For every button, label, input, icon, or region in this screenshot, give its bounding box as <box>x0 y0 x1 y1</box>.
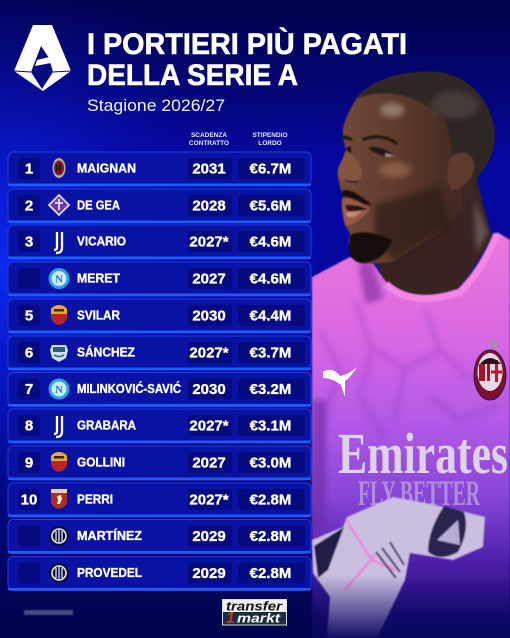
row 8: Grabara: €3.1M <box>250 418 291 434</box>
row 7: Milinković-Savić: 7 <box>25 381 33 398</box>
row 8: Grabara <box>8 409 311 443</box>
row 10: Perri: PERRI <box>77 492 113 506</box>
cheek highlight <box>379 162 411 178</box>
row 7: Milinković-Savić: 2030 <box>192 381 226 398</box>
player photo: Maignan <box>312 72 510 638</box>
neck highlight <box>474 198 488 254</box>
icon: Como <box>50 345 68 362</box>
row 3: Vicario: VICARIO <box>77 234 126 248</box>
column header: gross salary <box>252 132 288 147</box>
blurred watermark <box>24 610 73 615</box>
icon: Fiorentina <box>49 195 69 215</box>
row 2: De Gea: 2028 <box>192 198 226 214</box>
row 10: Perri: 2027* <box>189 492 229 508</box>
transfermarkt logo <box>222 598 286 627</box>
row 8: Grabara: 8 <box>25 418 33 434</box>
hair sheen <box>431 91 479 119</box>
left side shadow <box>312 400 326 530</box>
row 6: Sánchez: €3.7M <box>250 344 291 362</box>
row 12: Provedel: PROVEDEL <box>77 566 142 580</box>
row 7: Milinković-Savić: €3.2M <box>250 381 291 398</box>
crest star <box>486 337 500 350</box>
row 2: De Gea: 2 <box>25 198 33 214</box>
row 2: De Gea <box>8 189 311 223</box>
row 3: Vicario: 3 <box>25 234 33 250</box>
icon: Napoli <box>48 268 70 289</box>
player hair <box>356 72 494 174</box>
row 4: Meret <box>8 262 311 296</box>
row 5: Svilar: €4.4M <box>250 308 291 324</box>
fade into background <box>312 575 510 638</box>
row 11: Martínez: 2029 <box>192 528 226 545</box>
row 2: De Gea: €5.6M <box>250 198 291 214</box>
row 6: Sánchez: 6 <box>25 344 33 362</box>
row 1: Maignan: 1 <box>25 160 33 178</box>
row 12: Provedel: €2.8M <box>250 565 291 582</box>
row 6: Sánchez <box>8 336 311 370</box>
ranking table <box>8 152 311 590</box>
icon: Inter <box>49 563 69 583</box>
player ear <box>447 153 474 190</box>
icon: Torino <box>51 489 67 509</box>
row 9: Gollini: 9 <box>25 454 33 472</box>
icon: Napoli <box>48 378 70 400</box>
icon: Napoli: N <box>55 274 63 286</box>
row 1: Maignan <box>8 152 311 186</box>
shirt fold shadow <box>358 262 384 304</box>
row 5: Svilar: 5 <box>25 308 33 324</box>
column header: contract expiry: CONTRATTO <box>189 140 229 147</box>
player head <box>338 72 494 264</box>
row 1: Maignan: 2031 <box>192 160 226 178</box>
icon: Juventus <box>54 416 62 437</box>
player neck <box>372 185 492 297</box>
row 1: Maignan: €6.7M <box>250 160 291 178</box>
column header: contract expiry <box>189 132 229 147</box>
row 4: Meret: 2027 <box>192 270 226 288</box>
row 1: Maignan: MAIGNAN <box>77 162 136 176</box>
row 7: Milinković-Savić: MILINKOVIĆ-SAVIĆ <box>77 381 181 396</box>
icon: AC Milan <box>52 158 66 178</box>
icon: Roma <box>51 305 67 325</box>
shirt collar <box>386 234 497 298</box>
row 3: Vicario: 2027* <box>189 234 229 250</box>
column header: gross salary: LORDO <box>258 140 282 147</box>
row 11: Martínez: €2.8M <box>250 528 291 545</box>
row 4: Meret: €4.6M <box>250 270 291 288</box>
title: I PORTIERI PIÙ PAGATI <box>87 27 407 61</box>
row 9: Gollini: 2027 <box>192 454 226 472</box>
row 5: Svilar <box>8 299 311 333</box>
row 2: De Gea: DE GEA <box>77 198 120 212</box>
player shirt <box>312 232 510 638</box>
title: DELLA SERIE A <box>87 59 298 92</box>
title <box>87 27 407 92</box>
puma logo <box>323 367 357 397</box>
column header: contract expiry: SCADENZA <box>191 132 227 139</box>
row 6: Sánchez: SÁNCHEZ <box>77 344 135 360</box>
row 11: Martínez <box>8 520 311 554</box>
player mouth and moustache <box>342 190 372 226</box>
row 8: Grabara: 2027* <box>189 418 229 434</box>
transfermarkt logo: markt <box>237 610 281 626</box>
row 3: Vicario: €4.6M <box>250 234 291 250</box>
player eyes and brows <box>343 137 396 157</box>
row 12: Provedel: 2029 <box>192 565 226 582</box>
row 10: Perri <box>8 483 311 517</box>
row 12: Provedel <box>8 556 311 590</box>
row 9: Gollini: GOLLINI <box>77 456 125 470</box>
goalkeeper gloves <box>312 497 485 638</box>
player nose <box>338 150 362 183</box>
transfermarkt logo: transfer <box>226 598 283 614</box>
row 5: Svilar: SVILAR <box>77 308 120 322</box>
icon: Juventus <box>54 232 62 253</box>
transfermarkt logo: 1 <box>226 610 235 627</box>
subtitle: Stagione 2026/27 <box>87 96 225 115</box>
row 9: Gollini <box>8 446 311 480</box>
row 6: Sánchez: 2027* <box>189 344 229 362</box>
row 8: Grabara: GRABARA <box>77 418 136 432</box>
row 10: Perri: 10 <box>21 492 37 508</box>
AC Milan crest <box>474 350 506 400</box>
nostril <box>345 180 358 182</box>
shirt hexagon pattern <box>320 300 500 440</box>
icon: Roma <box>51 452 67 472</box>
Serie A logo <box>14 25 71 91</box>
player goatee <box>349 232 392 263</box>
row 5: Svilar: 2030 <box>192 308 226 324</box>
row 4: Meret: MERET <box>77 272 120 286</box>
icon: Inter <box>49 526 69 546</box>
row 9: Gollini: €3.0M <box>250 454 291 472</box>
icon: Napoli: N <box>55 384 63 396</box>
row 3: Vicario <box>8 225 311 259</box>
column header: gross salary: STIPENDIO <box>252 132 288 139</box>
forehead highlight <box>380 103 404 117</box>
jaw shadow <box>375 185 450 260</box>
row 11: Martínez: MARTÍNEZ <box>77 528 142 543</box>
row 7: Milinković-Savić <box>8 372 311 406</box>
row 10: Perri: €2.8M <box>250 492 291 508</box>
